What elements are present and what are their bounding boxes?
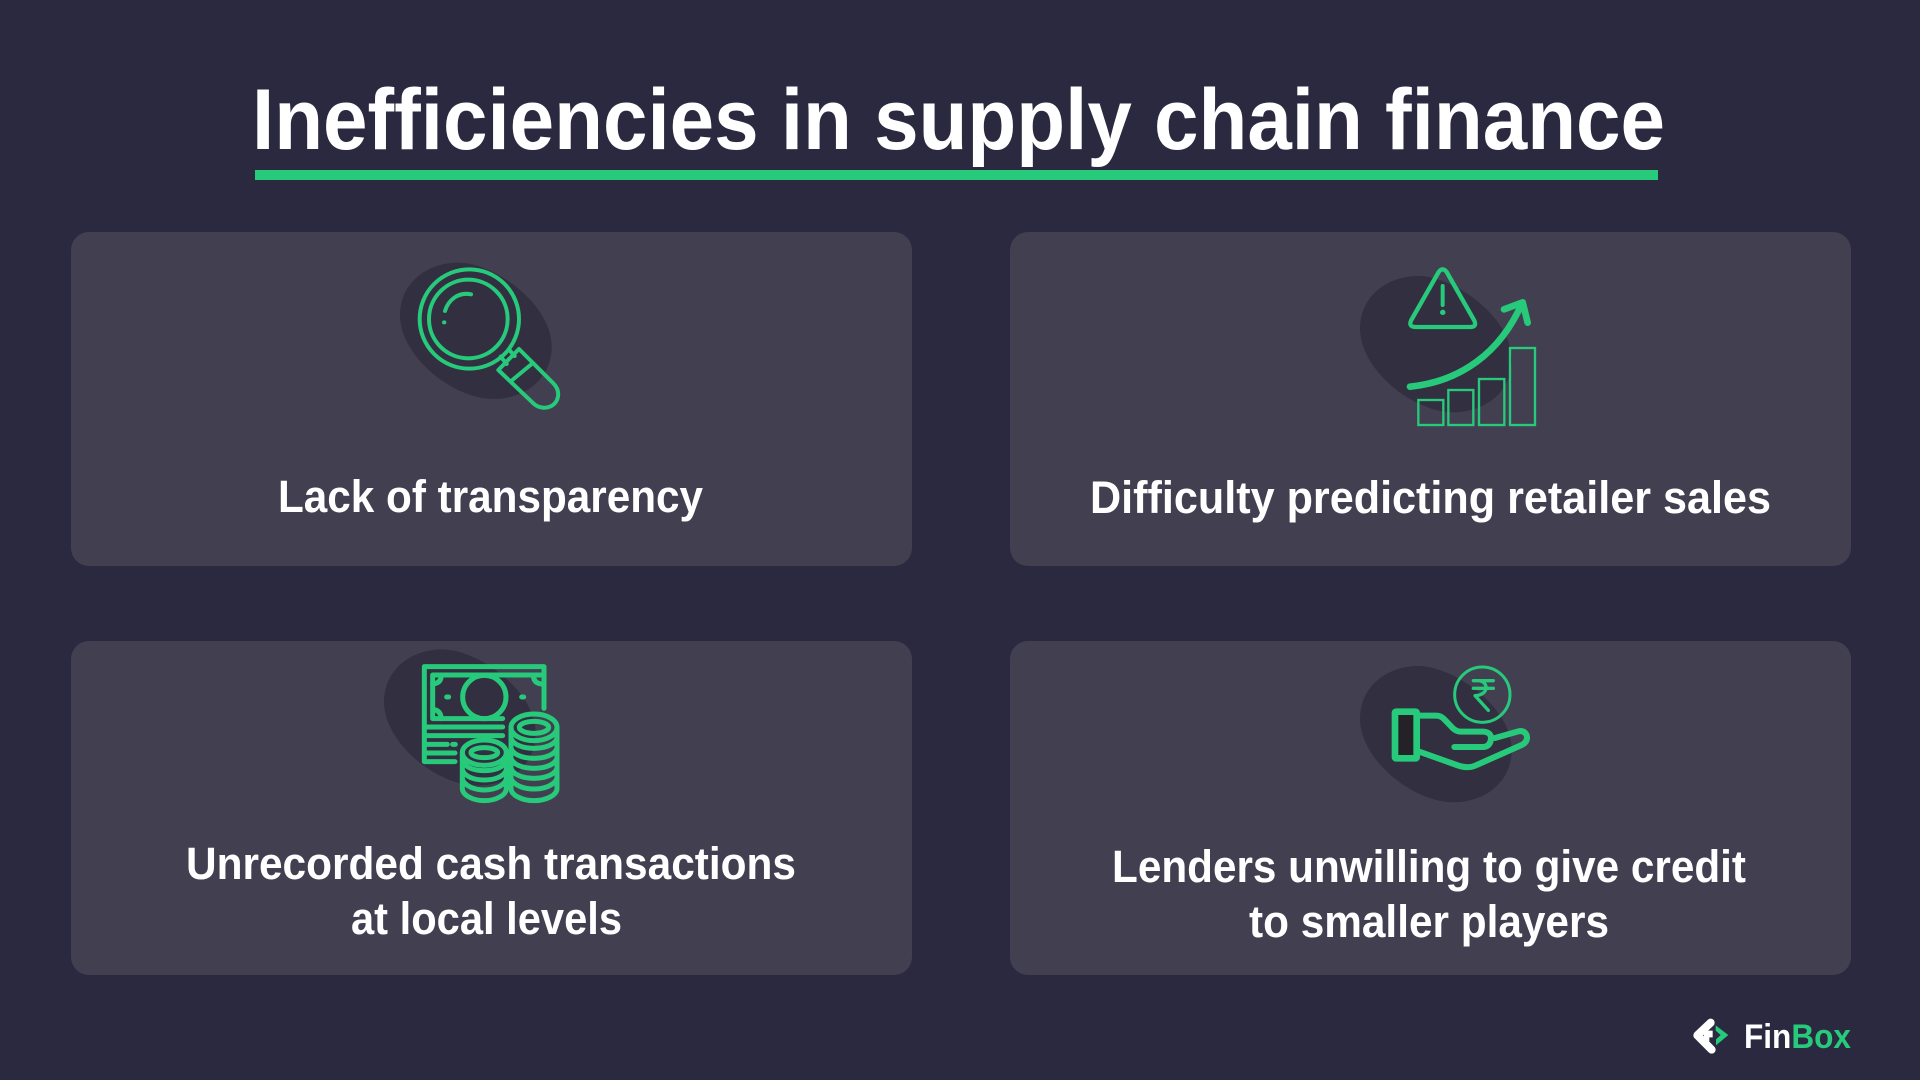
icon: warning and growth chart [1360, 269, 1535, 425]
label: Lack of transparency [278, 471, 703, 522]
logo: FinBox [1697, 1018, 1851, 1056]
label: Difficulty predicting retailer sales [1090, 472, 1771, 523]
label: Lenders unwilling to give credit [1112, 841, 1746, 892]
label [186, 838, 796, 944]
icon: banknote and coins [384, 649, 557, 801]
label: to smaller players [1249, 896, 1609, 947]
label: Unrecorded cash transactions [186, 838, 796, 889]
icon: hand holding rupee coin [1360, 666, 1527, 802]
label: at local levels [351, 893, 622, 944]
panel: unrecorded cash transactions [71, 641, 912, 975]
panel: difficulty predicting retailer sales [1010, 232, 1851, 566]
panel: lenders unwilling to give credit [1010, 641, 1851, 975]
panel: lack of transparency [71, 232, 912, 566]
icon: magnifying glass [400, 263, 558, 408]
label [1112, 841, 1746, 947]
wordmark: FinBox [1744, 1018, 1851, 1056]
title: Inefficiencies in supply chain finance [252, 72, 1665, 168]
icon: logo mark [1697, 1023, 1728, 1050]
